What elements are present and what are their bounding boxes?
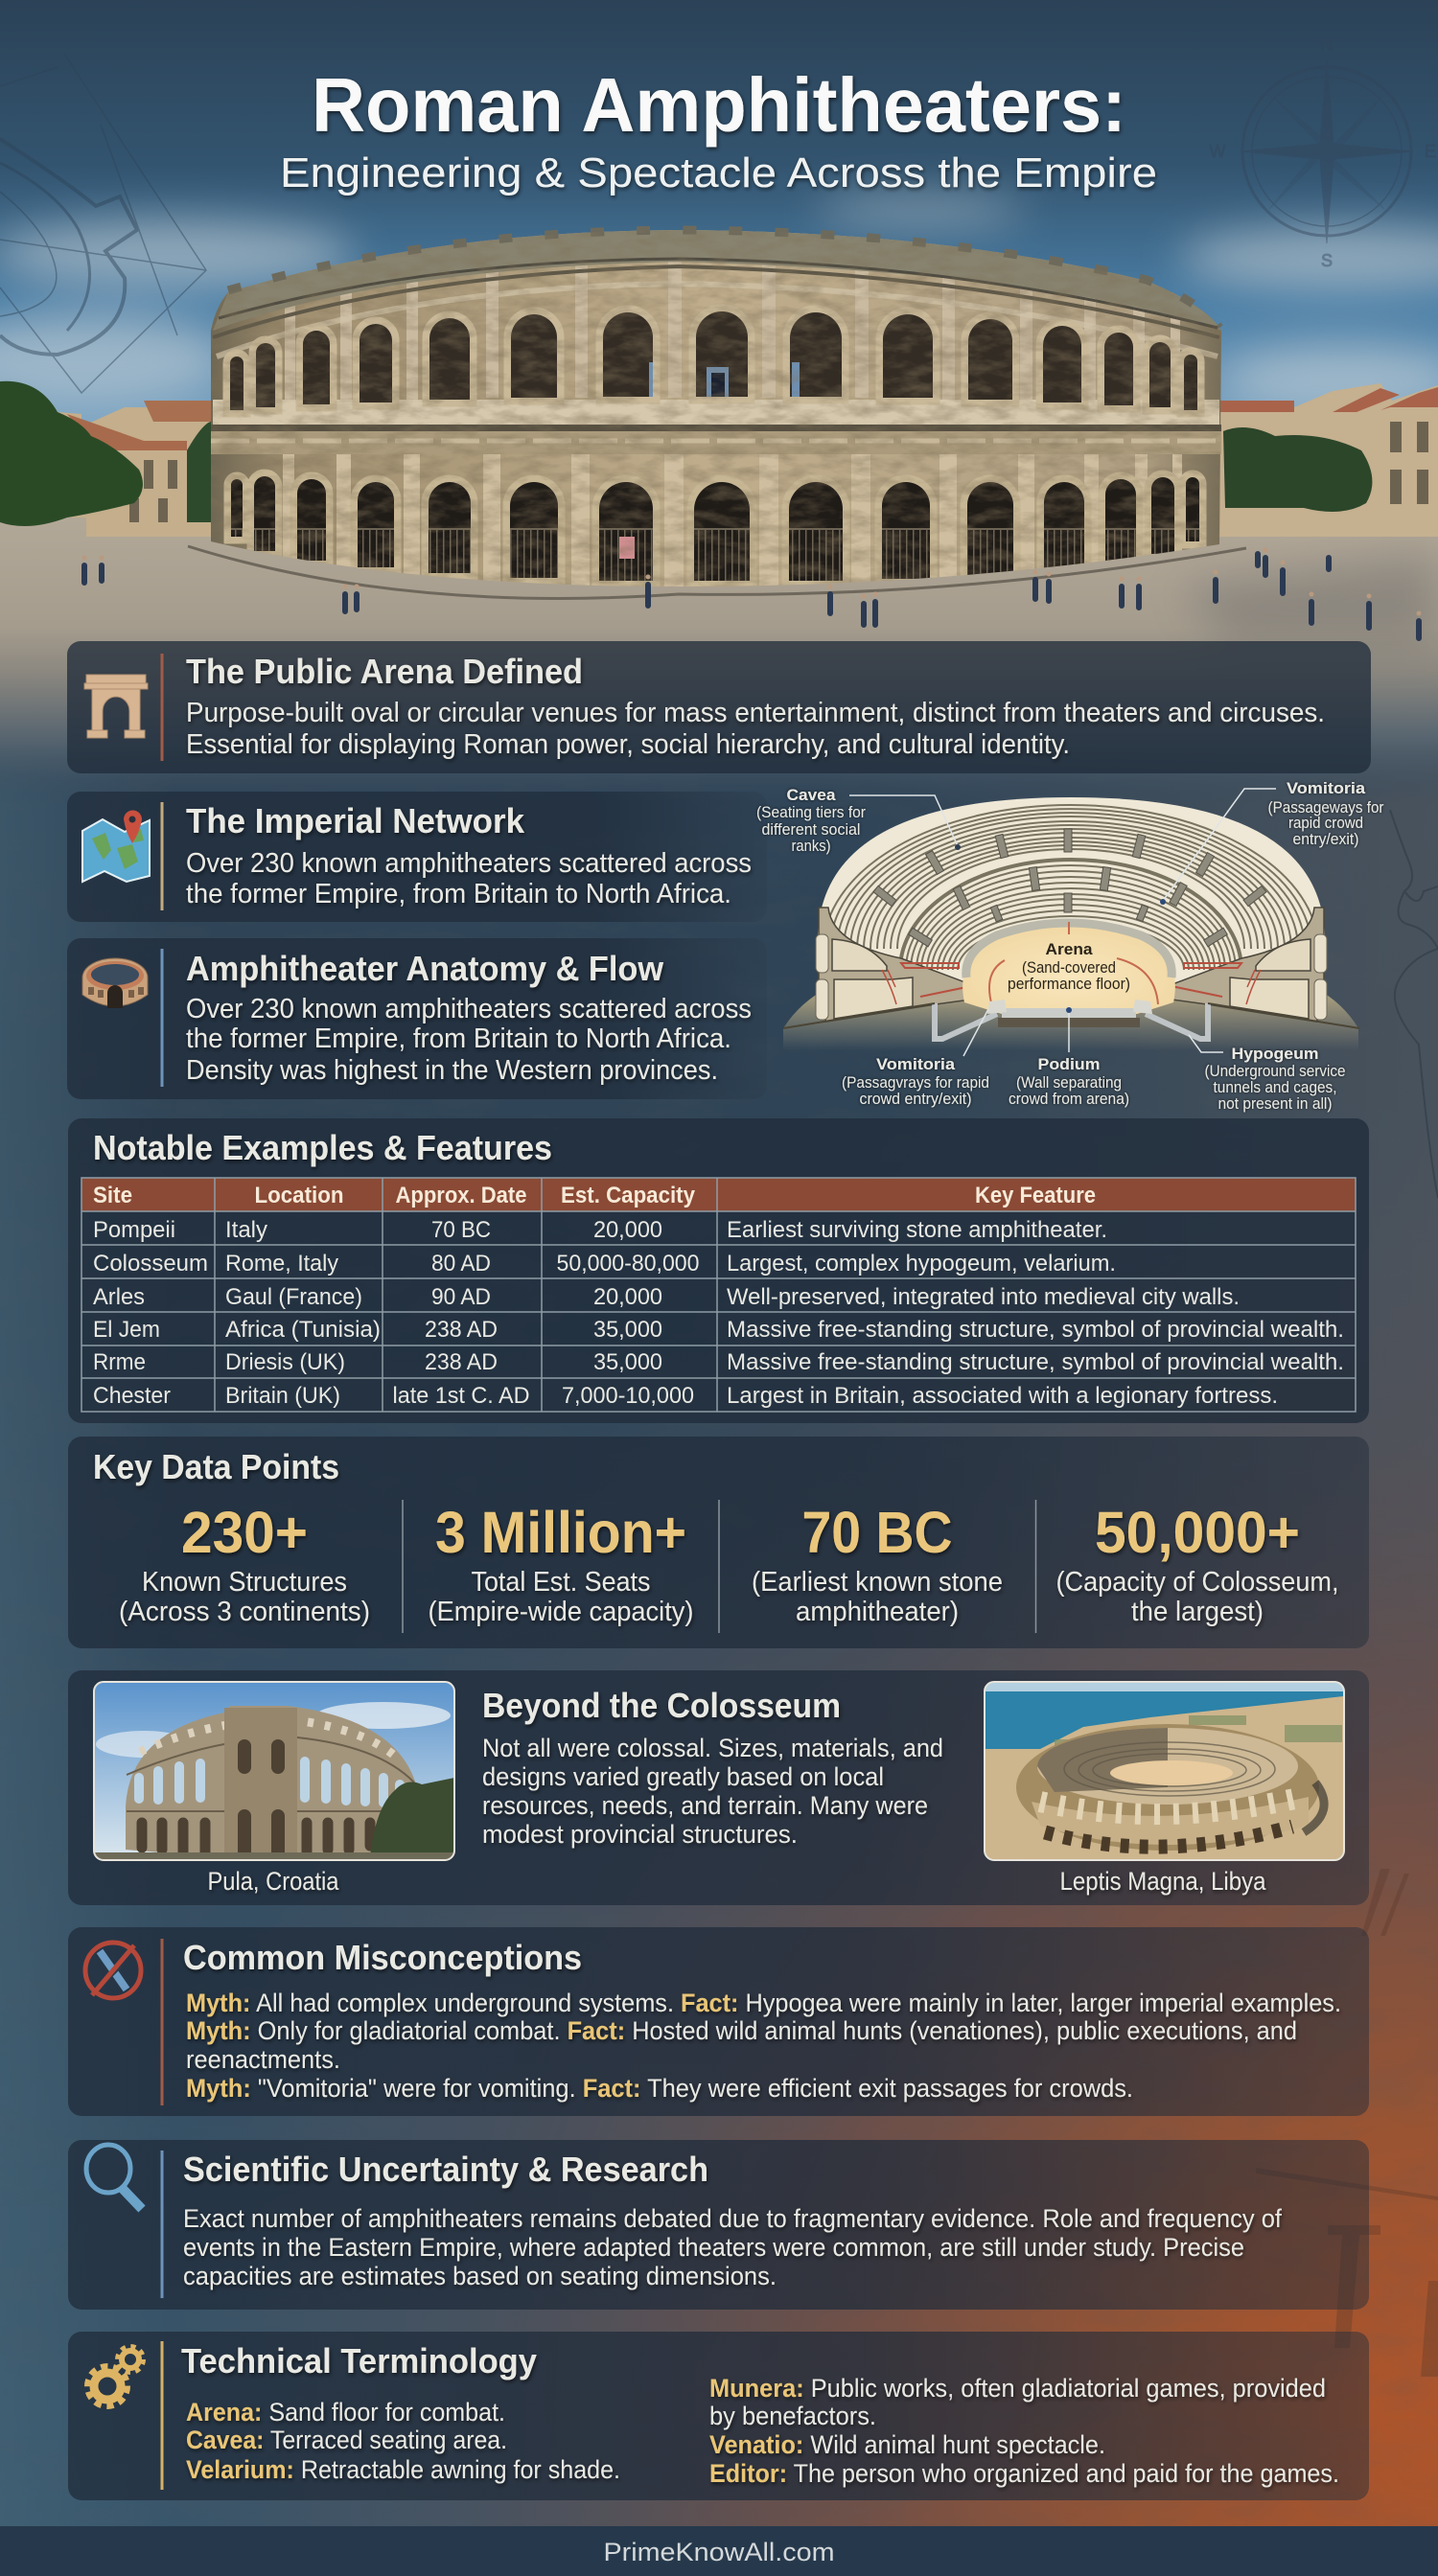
compass rose: W <box>1210 142 1225 161</box>
stat: 70 BC: 70 BC <box>801 1500 953 1565</box>
photo: Pula, Croatia <box>94 1682 454 1861</box>
table rows: Africa (Tunisia) <box>225 1317 381 1343</box>
table rows: Chester <box>93 1383 171 1409</box>
heading: The Public Arena Defined <box>186 652 583 691</box>
heading: Key Data Points <box>93 1447 339 1486</box>
body text: Essential for displaying Roman power, social hierarchy, and cultural identity. <box>186 729 1070 760</box>
panel: The Public Arena Defined <box>67 641 1371 773</box>
diagram: amphitheater cutaway anatomy <box>756 779 1384 1113</box>
crown cornice <box>213 230 1221 331</box>
panel: Key Data Points <box>68 1437 1369 1648</box>
table header row: Approx. Date <box>395 1183 527 1208</box>
ground glow <box>783 987 1358 1050</box>
label: Vomitoria upper: rapid crowd <box>1288 814 1363 832</box>
stat: 50,000+: the largest) <box>1131 1597 1264 1627</box>
heading: Scientific Uncertainty & Research <box>183 2150 708 2189</box>
table rows: Largest in Britain, associated with a legionary fortress. <box>727 1383 1278 1409</box>
caption: Leptis Magna: Leptis Magna, Libya <box>1060 1867 1266 1896</box>
table rows: Massive free-standing structure, symbol of provincial wealth. <box>727 1349 1344 1375</box>
plaza figures <box>84 550 1419 638</box>
label: Hypogeum: (Underground service <box>1204 1062 1346 1080</box>
compass rose: N <box>1321 34 1333 54</box>
table header row: Location <box>255 1183 343 1208</box>
subtitle: Engineering & Spectacle Across the Empire <box>280 150 1157 196</box>
label: Cavea <box>756 786 866 855</box>
main title: Roman Amphitheaters: <box>312 62 1126 148</box>
body text: events in the Eastern Empire, where adapted theaters were common, are still under study. Precise <box>183 2233 1244 2262</box>
panel: Common Misconceptions <box>68 1927 1369 2116</box>
stat: 50,000+: (Capacity of Colosseum, <box>1056 1567 1338 1598</box>
body text: the former Empire, from Britain to North Africa. <box>186 1024 731 1054</box>
heading: Common Misconceptions <box>183 1938 582 1977</box>
label: Vomitoria lower: Vomitoria <box>876 1055 956 1073</box>
table rows: Rrme <box>93 1349 146 1375</box>
label: Vomitoria upper: (Passageways for <box>1267 798 1384 816</box>
terms left column: Cavea: Terraced seating area. <box>186 2426 507 2454</box>
body text: Purpose-built oval or circular venues for mass entertainment, distinct from theaters and circuses. <box>186 698 1325 728</box>
terms right column: Editor: The person who organized and paid for the games. <box>709 2459 1339 2488</box>
label: Hypogeum: tunnels and cages, <box>1214 1078 1336 1096</box>
amphitheater structure <box>211 230 1221 593</box>
panel: Beyond the Colosseum <box>68 1670 1369 1905</box>
terms right column: by benefactors. <box>709 2402 876 2430</box>
terms left column: Arena: Sand floor for combat. <box>186 2398 505 2426</box>
icon: stone arch <box>84 675 148 738</box>
table rows: Italy <box>225 1217 267 1243</box>
table rows: Massive free-standing structure, symbol of provincial wealth. <box>727 1317 1344 1343</box>
table rows: Pompeii <box>93 1217 175 1243</box>
body text: Density was highest in the Western provinces. <box>186 1055 718 1086</box>
table rows: Arles <box>93 1284 145 1310</box>
terms left column <box>186 2398 620 2484</box>
stat: 70 BC: amphitheater) <box>796 1597 959 1627</box>
stat: 230+ <box>119 1500 370 1627</box>
terms left column: Velarium: Retractable awning for shade. <box>186 2455 620 2484</box>
poster on gate <box>619 537 635 559</box>
table rows: 20,000 <box>593 1217 662 1243</box>
label: Vomitoria upper: Vomitoria <box>1287 779 1366 797</box>
table rows: Colosseum <box>93 1251 208 1276</box>
stat: 3 Million+: 3 Million+ <box>435 1500 686 1565</box>
table rows: 20,000 <box>593 1284 662 1310</box>
plaza ground <box>0 508 1438 805</box>
hero photo: Roman amphitheater in plaza <box>0 0 1438 805</box>
sky peeking through arches <box>649 362 800 397</box>
lower arcade arches <box>211 476 1219 586</box>
data table <box>81 1178 1356 1412</box>
heading: Amphitheater Anatomy & Flow <box>186 949 664 988</box>
label: Vomitoria upper <box>1267 779 1384 848</box>
caption: Pula: Pula, Croatia <box>207 1867 339 1896</box>
table header row: Est. Capacity <box>561 1183 696 1208</box>
stat: 3 Million+: (Empire-wide capacity) <box>428 1597 694 1627</box>
gangways <box>873 829 1266 947</box>
body text: Over 230 known amphitheaters scattered across <box>186 848 752 879</box>
panel: Amphitheater Anatomy & Flow <box>67 938 767 1099</box>
icon: gears <box>88 2347 143 2405</box>
body text: capacities are estimates based on seating dimensions. <box>183 2262 777 2290</box>
body text <box>186 698 1325 760</box>
label: Arena: Arena <box>1045 940 1093 958</box>
text: Beyond the Colosseum: Beyond the Colosseum <box>482 1686 841 1725</box>
table rows: 50,000-80,000 <box>556 1251 700 1276</box>
table rows: Rome, Italy <box>225 1251 338 1276</box>
stat: 230+: 230+ <box>181 1500 308 1565</box>
body text: the former Empire, from Britain to North Africa. <box>186 879 731 909</box>
label: Podium <box>1009 1055 1129 1108</box>
footer site name: PrimeKnowAll.com <box>604 2538 834 2566</box>
label: Vomitoria lower: crowd entry/exit) <box>859 1090 972 1108</box>
panel: Technical Terminology <box>68 2332 1369 2500</box>
side cutaways <box>783 908 997 1039</box>
label: Hypogeum: Hypogeum <box>1231 1045 1319 1063</box>
icon: magnifying glass <box>86 2145 142 2209</box>
compass rose: S <box>1321 251 1333 270</box>
table rows: 238 AD <box>425 1349 498 1375</box>
stat: 230+: Known Structures <box>142 1567 347 1598</box>
table rows: Gaul (France) <box>225 1284 362 1310</box>
main title <box>280 62 1157 196</box>
label: Cavea: Cavea <box>786 786 836 804</box>
stat: 230+: (Across 3 continents) <box>119 1597 370 1627</box>
table rows <box>93 1217 1344 1409</box>
label: Cavea: (Seating tiers for <box>756 803 866 821</box>
arena motion arrows <box>989 922 1158 1006</box>
table rows: 80 AD <box>431 1251 491 1276</box>
label: Cavea: different social <box>761 820 861 839</box>
photo: Leptis Magna, Libya <box>985 1682 1344 1860</box>
table header row: Site <box>93 1183 132 1208</box>
terms right column <box>709 2374 1339 2488</box>
stat: 50,000+: 50,000+ <box>1095 1500 1300 1565</box>
myth and fact list: Myth: All had complex underground systems. Fact: Hypogea were mainly in later, larger imperial examples. <box>186 1989 1341 2017</box>
panel: The Imperial Network <box>67 792 767 922</box>
table rows: late 1st C. AD <box>393 1383 529 1409</box>
compass rose <box>1210 34 1436 270</box>
clouds <box>0 197 1438 412</box>
body text <box>186 848 752 909</box>
blueprint sketch <box>0 54 206 393</box>
podium wall <box>987 1000 1152 1027</box>
label: Arena: (Sand-covered <box>1022 958 1116 977</box>
label: Vomitoria lower <box>842 1055 989 1108</box>
left buildings <box>58 401 216 537</box>
table rows: Driesis (UK) <box>225 1349 345 1375</box>
text: Beyond the Colosseum: Not all were colossal. Sizes, materials, and <box>482 1734 943 1762</box>
label: Hypogeum <box>1204 1045 1346 1113</box>
heading: The Imperial Network <box>186 801 525 840</box>
right tree <box>1223 427 1372 512</box>
table rows: 238 AD <box>425 1317 498 1343</box>
heading: Notable Examples & Features <box>93 1128 552 1167</box>
label: Vomitoria upper: entry/exit) <box>1292 830 1359 848</box>
body text <box>183 2204 1282 2290</box>
table rows: 90 AD <box>431 1284 491 1310</box>
table rows: Largest, complex hypogeum, velarium. <box>727 1251 1116 1276</box>
table header row: Key Feature <box>975 1183 1096 1208</box>
stat: 3 Million+: Total Est. Seats <box>472 1567 650 1598</box>
table rows: 35,000 <box>593 1349 662 1375</box>
stat: 50,000+ <box>1056 1500 1338 1627</box>
table rows: 70 BC <box>431 1217 491 1243</box>
terms right column: Venatio: Wild animal hunt spectacle. <box>709 2430 1105 2459</box>
label: Arena <box>1008 940 1130 993</box>
arena floor <box>963 923 1175 1014</box>
leader lines <box>849 789 1276 1056</box>
myth and fact list: Myth: "Vomitoria" were for vomiting. Fact: They were efficient exit passages for crowds. <box>186 2074 1133 2103</box>
upper half-columns <box>285 262 1180 400</box>
body text: Exact number of amphitheaters remains debated due to fragmentary evidence. Role and frequency of <box>183 2204 1282 2233</box>
panel: Scientific Uncertainty & Research <box>68 2140 1369 2310</box>
label: Vomitoria lower: (Passagvrays for rapid <box>842 1073 989 1092</box>
icon: mini amphitheater <box>82 958 148 1008</box>
panel: Notable Examples & Features <box>68 1118 1369 1423</box>
label: Hypogeum: not present in all) <box>1218 1094 1333 1113</box>
lower pilasters <box>283 454 1182 593</box>
stat: 70 BC <box>752 1500 1003 1627</box>
icon: prohibited sword <box>85 1943 141 1998</box>
myth and fact list: Myth: Only for gladiatorial combat. Fact: Hosted wild animal hunts (venationes), public executions, and <box>186 2016 1297 2045</box>
heading: Technical Terminology <box>181 2341 537 2380</box>
text: Beyond the Colosseum: resources, needs, and terrain. Many were <box>482 1791 928 1820</box>
decorative faint column sketches <box>1256 1869 1438 2377</box>
upper arcade arches <box>230 311 1197 410</box>
stone texture <box>211 230 1221 586</box>
attic band <box>213 400 1219 425</box>
curb <box>188 546 1246 598</box>
myth and fact list: reenactments. <box>186 2045 340 2074</box>
label: Podium: (Wall separating <box>1016 1073 1122 1092</box>
table rows: Well-preserved, integrated into medieval city walls. <box>727 1284 1240 1310</box>
left tree <box>0 381 143 526</box>
seating tiers <box>818 797 1325 997</box>
text: Beyond the Colosseum: designs varied greatly based on local <box>482 1762 884 1791</box>
body text <box>186 994 752 1086</box>
text: Beyond the Colosseum <box>482 1686 943 1849</box>
stat: 70 BC: (Earliest known stone <box>752 1567 1003 1598</box>
icon: map with pin <box>82 811 150 882</box>
table header row <box>93 1183 1096 1208</box>
stat: 3 Million+ <box>428 1500 694 1627</box>
footer bar <box>0 2526 1438 2576</box>
cast shadow lower right <box>1179 551 1438 644</box>
myth and fact list <box>186 1989 1341 2103</box>
sky <box>0 0 1438 546</box>
table rows: El Jem <box>93 1317 160 1343</box>
table rows: 7,000-10,000 <box>562 1383 694 1409</box>
terms right column: Munera: Public works, often gladiatorial games, provided <box>709 2374 1326 2403</box>
label: Cavea: ranks) <box>792 837 830 855</box>
table rows: Britain (UK) <box>225 1383 340 1409</box>
label: Podium: Podium <box>1037 1055 1101 1073</box>
table rows: 35,000 <box>593 1317 662 1343</box>
right buildings <box>1219 383 1438 537</box>
label: Podium: crowd from arena) <box>1009 1090 1129 1108</box>
body text: Over 230 known amphitheaters scattered across <box>186 994 752 1024</box>
compass rose: E <box>1425 142 1436 161</box>
text: Beyond the Colosseum: modest provincial structures. <box>482 1820 798 1849</box>
decorative wall cracks <box>1390 810 1438 1198</box>
label: Arena: performance floor) <box>1008 975 1130 993</box>
table rows: Earliest surviving stone amphitheater. <box>727 1217 1107 1243</box>
